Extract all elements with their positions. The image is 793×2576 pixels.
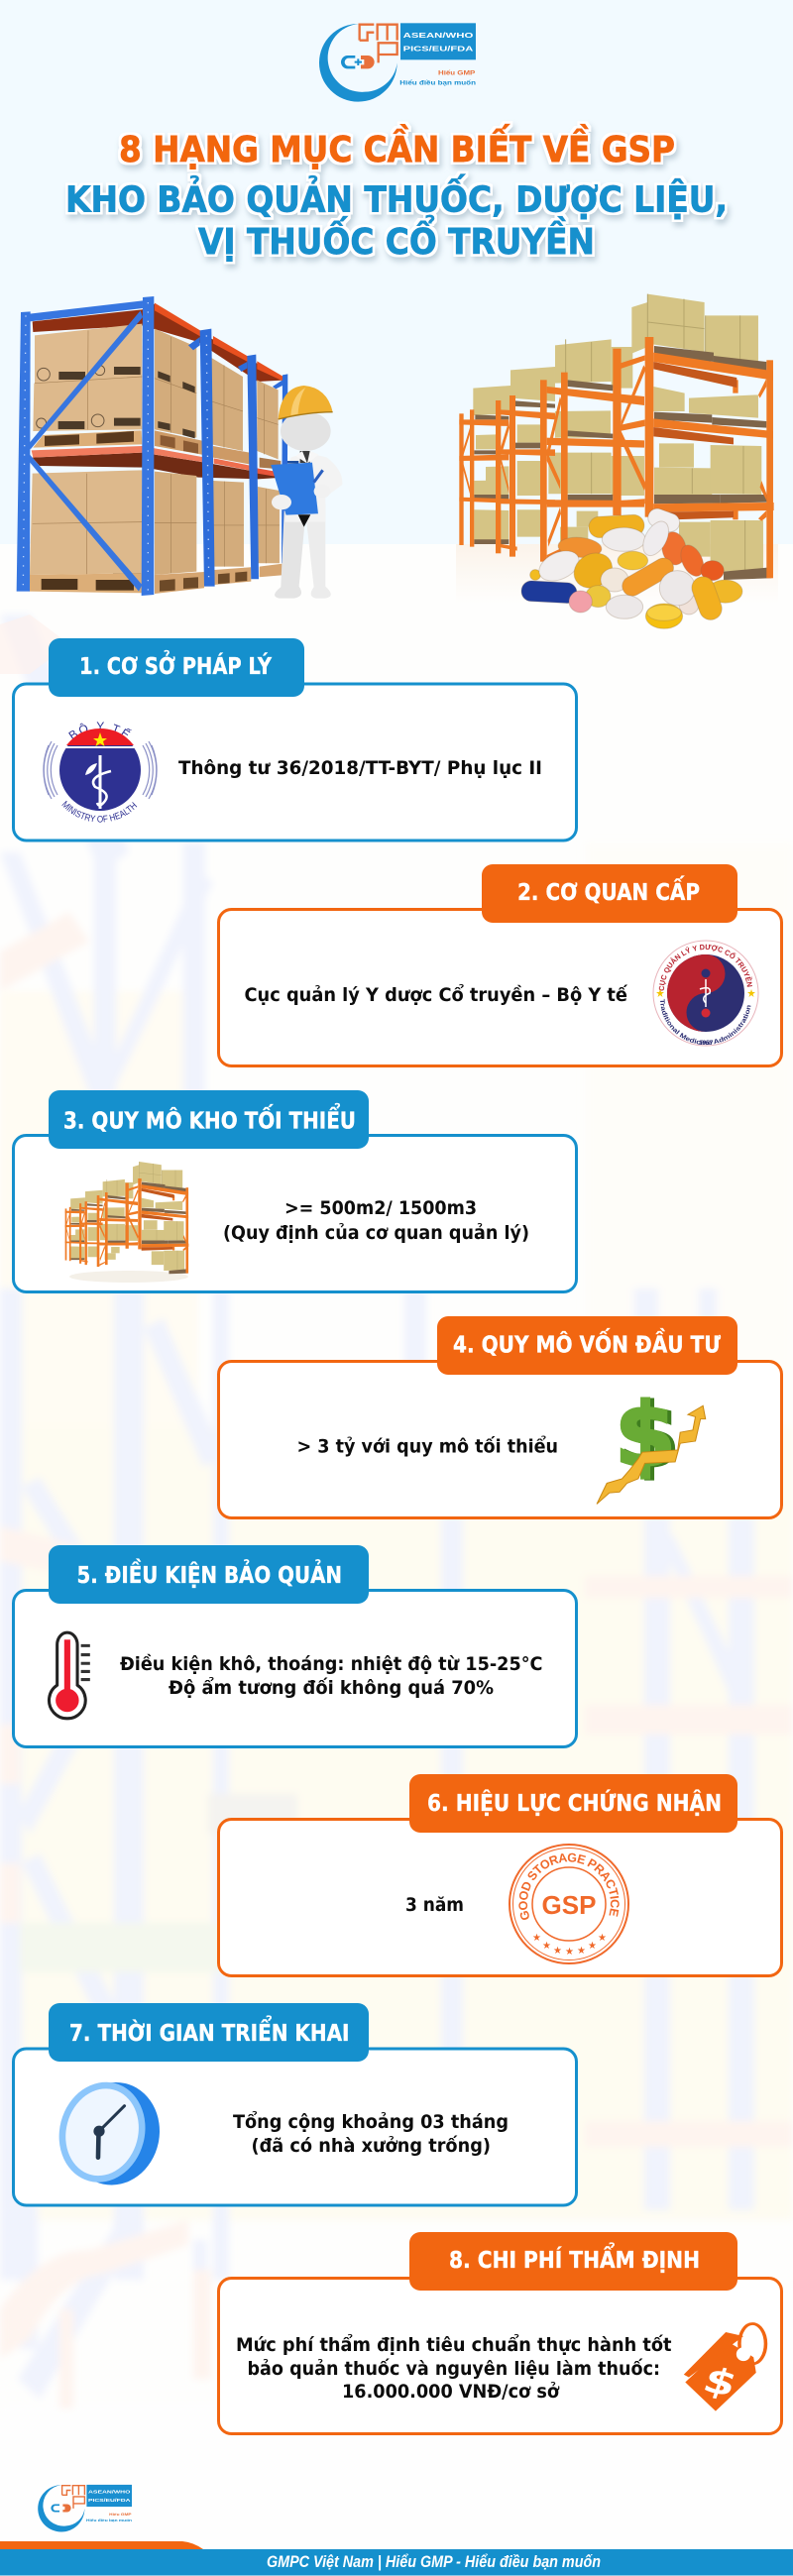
icon: GSP stamp [509, 1844, 629, 1964]
card 8 text: 16.000.000 VNĐ/cơ sở [342, 2381, 560, 2403]
card 2 text: Cục quản lý Y dược Cổ truyền – Bộ Y tế [244, 983, 628, 1006]
logo: bottom: ASEAN/WHO [88, 2490, 131, 2495]
card 6: certificate validity [217, 1774, 783, 1977]
card 6 heading: 6. HIỆU LỰC CHỨNG NHẬN [427, 1789, 722, 1817]
card 8: appraisal fee [218, 2232, 781, 2434]
footer text: GMPC Việt Nam | Hiểu GMP - Hiểu điều bạn muốn [267, 2552, 601, 2571]
card 8 panel [218, 2278, 781, 2434]
card 8 text [236, 2333, 672, 2403]
icon: GSP stamp: GSP [542, 1890, 596, 1920]
card 7: implementation time [14, 2003, 577, 2205]
icon: ministry of health emblem: BỘ Y TẾ [68, 722, 132, 739]
title: VỊ THUỐC CỔ TRUYỀN [198, 215, 595, 263]
title [65, 124, 728, 263]
card 3 text: >= 500m2/ 1500m3 [284, 1197, 477, 1219]
icon: dollar with rising arrow: $ [615, 1384, 676, 1486]
card 7 text [233, 2110, 509, 2157]
logo: bottom: Hiểu điều bạn muốn [86, 2518, 133, 2522]
card 2 heading: 2. CƠ QUAN CẤP [517, 875, 700, 906]
card 3 text: (Quy định của cơ quan quản lý) [223, 1222, 529, 1244]
card 5 text: Độ ẩm tương đối không quá 70% [169, 1676, 494, 1699]
icon: traditional medicine administration emblem: 1957 [699, 1040, 714, 1047]
card 2 panel [218, 910, 781, 1066]
logo: bottom: Hiếu GMP [109, 2512, 132, 2517]
illustration: worker with clipboard [271, 386, 342, 599]
card 4 heading: 4. QUY MÔ VỐN ĐẦU TƯ [453, 1328, 721, 1358]
logo: bottom [38, 2485, 133, 2531]
card 4 heading [437, 1316, 737, 1375]
card 3 panel [14, 1136, 577, 1292]
card 1 heading [49, 638, 304, 697]
icon: traditional medicine administration emblem [652, 940, 759, 1047]
card 7 heading: 7. THỜI GIAN TRIỂN KHAI [69, 2016, 349, 2047]
card 6 panel [218, 1820, 781, 1976]
card 8 heading [409, 2232, 737, 2291]
icon: thermometer [49, 1632, 90, 1719]
card 4: investment capital [218, 1316, 781, 1518]
icon: ministry of health emblem: MINISTRY OF HEALTH [61, 801, 137, 823]
logo: top [319, 23, 476, 102]
title: 8 HẠNG MỤC CẦN BIẾT VỀ GSP [119, 124, 675, 170]
card 5 text: Điều kiện khô, thoáng: nhiệt độ từ 15-25°C [120, 1652, 543, 1675]
card 5 heading: 5. ĐIỀU KIỆN BẢO QUẢN [77, 1558, 342, 1589]
card 7 text: Tổng cộng khoảng 03 tháng [233, 2110, 509, 2133]
icon: price tag: $ [698, 2359, 742, 2405]
card 7 heading [49, 2003, 369, 2062]
card 2: issuing authority [217, 864, 783, 1067]
icon: GSP stamp: GOOD STORAGE PRACTICE [518, 1853, 620, 1920]
card 6 heading [409, 1774, 737, 1833]
icon: GSP stamp: ★★★★★★★ [532, 1933, 607, 1958]
logo: top: Hiểu điều bạn muốn [399, 77, 476, 86]
card 3 heading [49, 1090, 369, 1149]
card 3: minimum warehouse size [14, 1090, 577, 1292]
illustration: blue warehouse rack [17, 296, 287, 596]
icon: dollar with rising arrow: $ [619, 1385, 680, 1487]
card 5: storage conditions [14, 1545, 577, 1746]
icon: clock [48, 2072, 170, 2193]
card 8 heading: 8. CHI PHÍ THẨM ĐỊNH [449, 2243, 700, 2274]
icon: small warehouse rack [65, 1162, 188, 1283]
card 2 heading [482, 864, 737, 923]
card 5 panel [14, 1590, 577, 1746]
illustration: orange warehouse rack with boxes [459, 294, 774, 580]
card 7 text: (đã có nhà xưởng trống) [252, 2134, 491, 2157]
card 1 heading: 1. CƠ SỞ PHÁP LÝ [79, 650, 273, 680]
card 3 heading: 3. QUY MÔ KHO TỐI THIỂU [63, 1104, 356, 1134]
logo: bottom: PICS/EU/FDA [88, 2498, 132, 2503]
card 3 text [223, 1197, 529, 1244]
card 5 text [120, 1652, 543, 1699]
card 6 text: 3 năm [405, 1894, 464, 1916]
card 1: legal basis [12, 638, 578, 842]
card 1 text: Thông tư 36/2018/TT-BYT/ Phụ lục II [178, 757, 542, 779]
icon: traditional medicine administration emblem: CỤC QUẢN LÝ Y DƯỢC CỔ TRUYỀN [658, 944, 752, 991]
icon: ministry of health emblem [43, 722, 158, 823]
footer bar [0, 2541, 793, 2575]
card 7 panel [14, 2049, 577, 2205]
card 4 panel [218, 1362, 781, 1518]
card 8 text: bảo quản thuốc và nguyên liệu làm thuốc: [248, 2357, 660, 2380]
icon: price tag [684, 2324, 765, 2411]
card 5 heading [49, 1545, 369, 1604]
card 4 text: > 3 tỷ với quy mô tối thiểu [297, 1435, 558, 1457]
logo: top: Hiếu GMP [438, 68, 476, 76]
title: KHO BẢO QUẢN THUỐC, DƯỢC LIỆU, [65, 174, 728, 220]
illustration: pile of pills [520, 506, 742, 628]
logo: top: PICS/EU/FDA [403, 45, 474, 54]
card 1 panel [14, 684, 577, 840]
icon: traditional medicine administration emblem: Traditional Medicine Administration [660, 999, 751, 1045]
logo: top: ASEAN/WHO [403, 31, 474, 40]
icon: dollar with rising arrow [597, 1384, 706, 1504]
card 8 text: Mức phí thẩm định tiêu chuẩn thực hành tốt [236, 2333, 672, 2356]
